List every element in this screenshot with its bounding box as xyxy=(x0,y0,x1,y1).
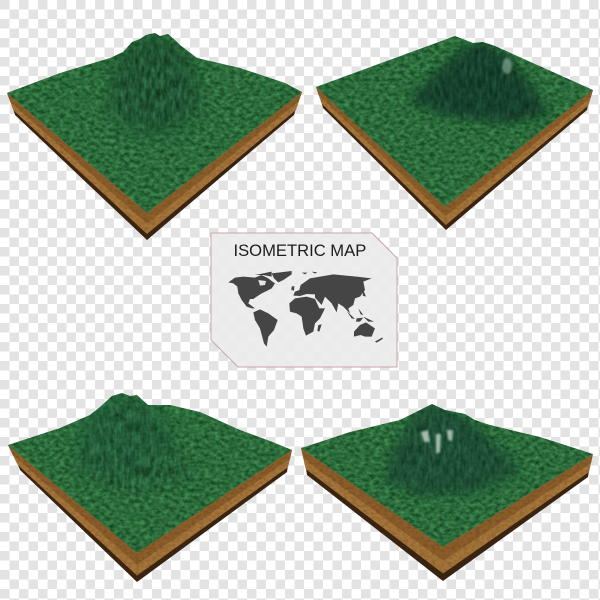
terrain block: top right xyxy=(310,30,600,233)
grass surface with mountain xyxy=(7,33,302,213)
grass surface with dark mountain xyxy=(316,36,593,207)
soil layers xyxy=(310,85,600,233)
africa xyxy=(289,297,325,336)
card panel xyxy=(211,233,397,367)
terrain block: bottom left xyxy=(8,393,292,582)
arctic islands xyxy=(255,272,272,277)
snow patches xyxy=(421,430,453,454)
world map xyxy=(228,271,383,347)
new zealand xyxy=(375,337,383,343)
indonesia and philippines xyxy=(347,311,355,319)
japan xyxy=(363,290,366,297)
info card: isometric map xyxy=(211,233,397,367)
australia xyxy=(354,322,375,337)
soil layers xyxy=(0,90,305,242)
greenland xyxy=(272,271,292,282)
terrain block: bottom right xyxy=(301,404,593,581)
uk and arctic specks xyxy=(291,286,294,291)
grass surface with mountain xyxy=(8,393,292,553)
north america xyxy=(228,275,275,308)
eurasia xyxy=(293,274,372,313)
hudson bay xyxy=(258,280,266,286)
soil layers xyxy=(8,445,292,582)
south america xyxy=(253,309,278,347)
grass surface with snow-streaked mountain xyxy=(301,404,593,547)
madagascar xyxy=(317,324,322,332)
terrain block: top left xyxy=(0,25,310,242)
soil layers xyxy=(295,445,600,585)
card title: ISOMETRIC MAP xyxy=(234,241,366,260)
